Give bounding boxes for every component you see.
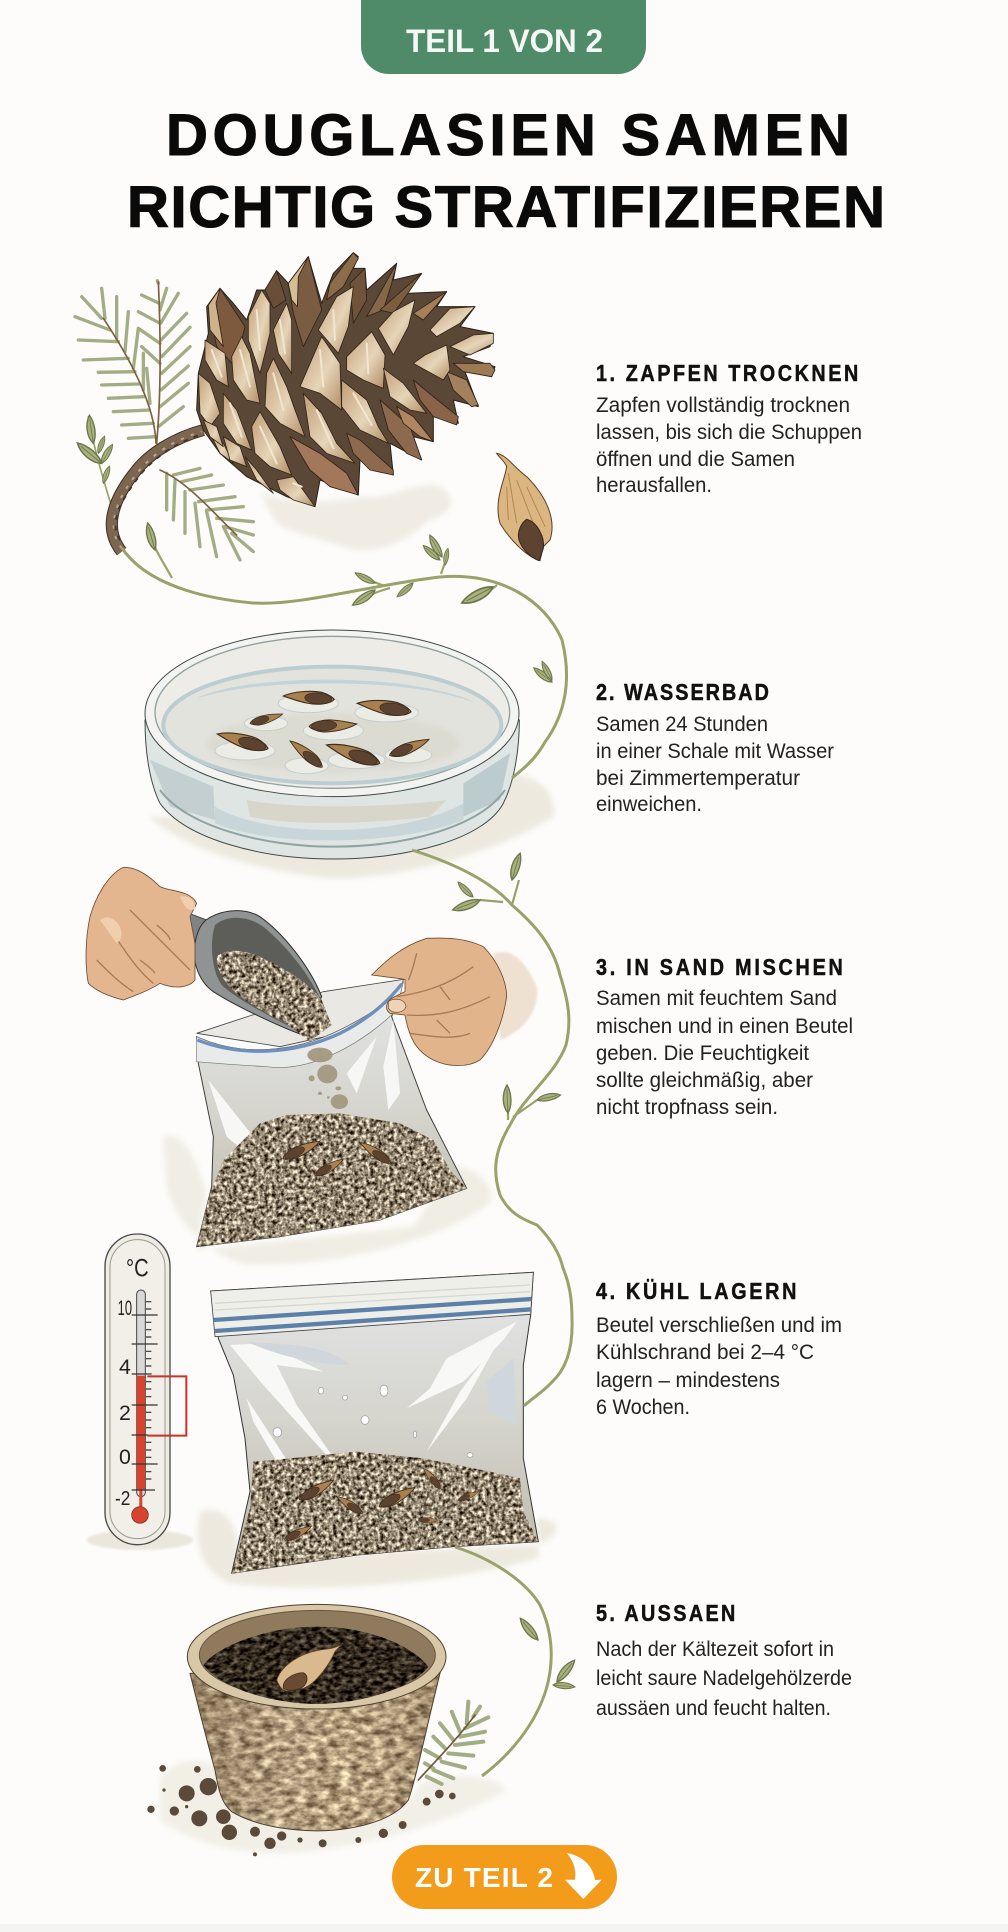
left hand (86, 867, 197, 1000)
button: Zu Teil 2 (392, 1845, 617, 1909)
step 2 text: 2. WASSERBAD (596, 680, 769, 705)
pot rim (187, 1604, 446, 1709)
step 5 text: Nach der Kältezeit sofort in (596, 1638, 834, 1661)
step 4 text: Kühlschrand bei 2–4 °C (596, 1341, 814, 1364)
title: RICHTIG STRATIFIZIEREN (127, 175, 885, 240)
falling sand (307, 1048, 348, 1109)
bag shadow (198, 1510, 557, 1588)
panel: step 1 illustration, pine cone and branch (74, 253, 552, 561)
step 4 text: lagern – mindestens (596, 1369, 780, 1392)
step 3 text: mischen und in einen Beutel (596, 1015, 853, 1038)
soil crumbs (147, 1765, 456, 1856)
step 4 text (596, 1278, 842, 1419)
title: DOUGLASIEN SAMEN (166, 103, 850, 168)
dish rim (145, 630, 519, 797)
step 2 text: Samen 24 Stunden (596, 713, 768, 736)
bag sand (197, 1113, 467, 1247)
step 3 text: Samen mit feuchtem Sand (596, 987, 837, 1010)
needle twigs (75, 281, 253, 560)
bag wrinkles (208, 1020, 400, 1170)
soil shadow (160, 1760, 507, 1853)
falling winged seed (497, 453, 552, 561)
seeds in sand (283, 1466, 479, 1543)
branch (112, 430, 203, 552)
cone scale highlights (212, 310, 372, 487)
thermometer: 4 (119, 1355, 131, 1379)
step 5 text: leicht saure Nadelgehölzerde (596, 1667, 852, 1690)
step 1 text: öffnen und die Samen (596, 448, 795, 471)
red highlight box (147, 1376, 186, 1436)
dish body (145, 720, 519, 859)
pine cone (197, 253, 495, 507)
thermometer: °C (126, 1255, 149, 1283)
step 4 text: Beutel verschließen und im (596, 1314, 842, 1337)
step 2 text: bei Zimmertemperatur (596, 767, 800, 790)
step 2 text: einweichen. (596, 793, 702, 816)
step 1 text: lassen, bis sich die Schuppen (596, 421, 862, 444)
step 5 text: aussäen und feucht halten. (596, 1697, 831, 1720)
step 4 text: 4. KÜHL LAGERN (596, 1278, 796, 1304)
right hand (372, 938, 507, 1066)
step 2 text (596, 680, 834, 816)
icon: curved down arrow (565, 1853, 602, 1899)
thermometer shadow (87, 1530, 193, 1550)
badge: Teil 1 von 2 (361, 0, 646, 74)
step 5 text (596, 1601, 852, 1720)
cone back scales (208, 253, 495, 495)
scoop (167, 905, 207, 953)
step 3 text: 3. IN SAND MISCHEN (596, 955, 843, 980)
panel: step 2 illustration, glass dish with seeds (145, 630, 554, 878)
cone silhouette (197, 253, 495, 507)
thermometer: 0 (119, 1445, 131, 1469)
winged seed on soil (277, 1643, 343, 1691)
bag sand (232, 1452, 538, 1573)
pot body (190, 1667, 442, 1831)
watercolor shadow (260, 485, 451, 550)
sleeve (493, 952, 537, 1040)
step 1 text (596, 361, 862, 497)
cone light scales (198, 287, 493, 507)
badge: Teil 1 von 2: TEIL 1 VON 2 (406, 23, 603, 59)
thermometer: -2 (115, 1487, 130, 1510)
bag (211, 1272, 538, 1573)
step 2 text: in einer Schale mit Wasser (596, 740, 834, 763)
step 5 text: 5. AUSSAEN (596, 1601, 735, 1626)
thermometer: 10 (118, 1296, 132, 1320)
condensation droplets (273, 1385, 473, 1457)
bag body (197, 982, 467, 1247)
step 1 text: Zapfen vollständig trocknen (596, 394, 850, 417)
thermometer (105, 1234, 170, 1545)
panel: step 3 illustration, hands pouring sand into bag (86, 867, 537, 1265)
step 1 text: herausfallen. (596, 474, 712, 497)
step 4 text: 6 Wochen. (596, 1396, 690, 1419)
soil (203, 1627, 428, 1704)
title (127, 103, 885, 240)
seeds in water (215, 689, 432, 774)
bag shadow (163, 1136, 491, 1265)
panel: step 5 illustration, peat pot with seed (147, 1604, 507, 1856)
vine: connecting cone to dish (122, 522, 567, 778)
water (163, 667, 501, 783)
vine: connecting dish through bag to step 4 (412, 850, 572, 1406)
bag top strip (211, 1272, 533, 1337)
small sprig leaves (74, 415, 115, 484)
step 3 text: nicht tropfnass sein. (596, 1096, 778, 1119)
thermometer: 2 (119, 1401, 131, 1425)
step 3 text (596, 955, 853, 1119)
step 1 text: 1. ZAPFEN TROCKNEN (596, 361, 858, 386)
bag back (197, 979, 403, 1047)
bag wrinkles (230, 1322, 517, 1472)
panel: step 4 illustration, thermometer and sealed bag (87, 1234, 557, 1588)
zip bands (213, 1299, 532, 1331)
step 3 text: sollte gleichmäßig, aber (596, 1069, 813, 1092)
dish shadow (148, 775, 554, 878)
button: Zu Teil 2: ZU TEIL 2 (415, 1862, 553, 1893)
vine: bag to pot (455, 1547, 577, 1776)
bag zip strip (197, 982, 403, 1068)
spruce sprig (418, 1702, 488, 1784)
step 3 text: geben. Die Feuchtigkeit (596, 1042, 809, 1065)
